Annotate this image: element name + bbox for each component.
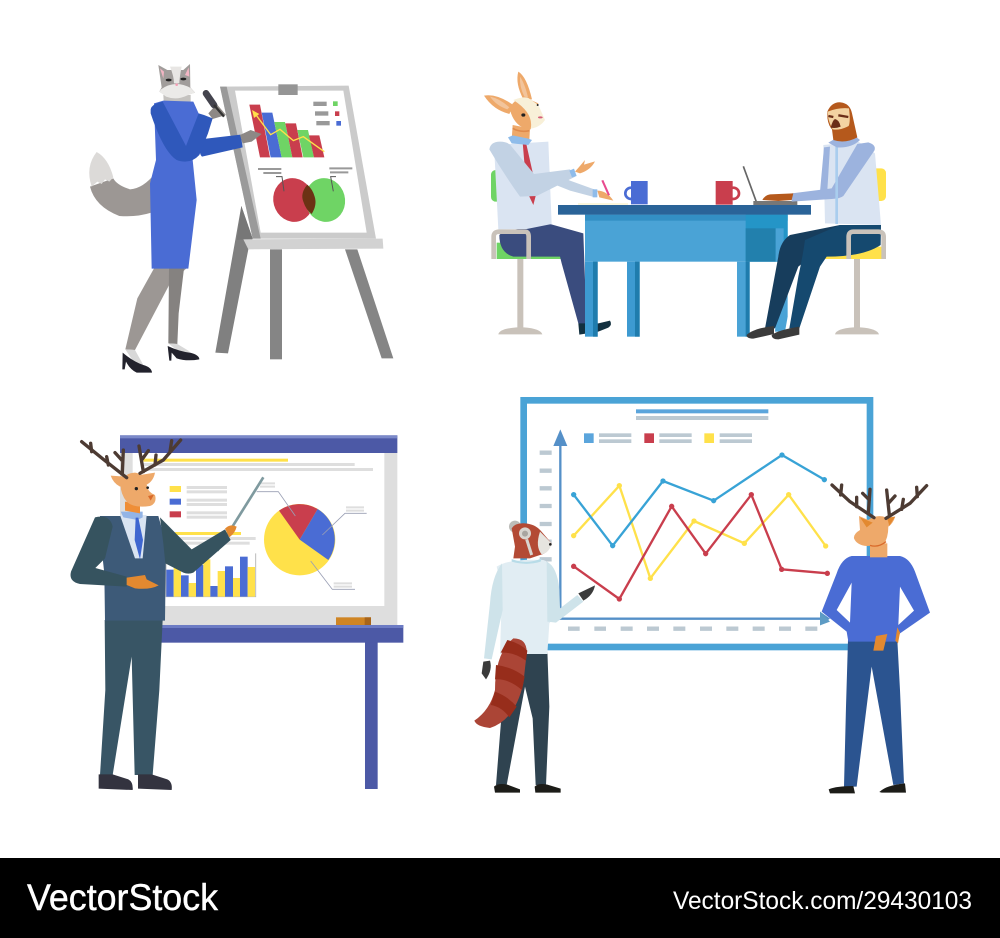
bar chart with trend arrow [249,105,324,157]
red panda tail [474,638,527,728]
deer shoes [99,774,172,790]
red mug [716,181,739,205]
sloth arm and hands [762,142,875,224]
brand name: VectorStock [27,877,218,918]
cat tail [89,152,155,216]
deer shirt and tie [120,512,147,559]
board heading lines [636,409,768,420]
chart axes and ticks [540,429,830,629]
red panda legs and shoes [494,650,561,793]
easel board [220,84,383,249]
left chair [491,170,562,334]
sloth shoes [747,326,799,339]
pointer stick [217,477,263,551]
table [558,205,811,337]
deer arms and hands [71,517,237,589]
deer neck [125,502,140,513]
cat neck [163,95,191,111]
table leg [365,642,378,789]
rabbit neck and collar [508,125,532,145]
red panda head [509,521,552,564]
rabbit trousers and shoes [499,224,611,335]
deer neck and head [854,516,895,557]
deer sweater [822,556,930,642]
chart legend [584,433,752,443]
blue mug [625,181,648,204]
scene: deer presenter at whiteboard with pie chart [71,435,403,790]
stacked bar chart [166,553,256,597]
board heading lines [143,459,373,545]
deer head [111,473,156,507]
scene: cat presenter at flip-chart easel [89,64,393,373]
easel legs [215,206,393,359]
right chair [823,168,886,334]
chart legend [313,101,341,126]
sloth legs [765,225,881,328]
cat arms [151,102,243,162]
deer trousers [100,620,163,775]
cat hands and microphone [206,93,262,143]
cat legs and shoes [122,267,199,373]
table top and eraser [160,617,403,643]
rabbit tie [523,143,536,205]
pie chart [257,483,367,589]
red panda sweater and arms [482,560,595,679]
sloth head [827,102,860,147]
whiteboard frame [524,400,870,647]
rabbit hands and pen [575,160,628,205]
board legend [170,486,227,519]
cat head [158,64,195,98]
line chart: blue series [571,452,827,548]
rabbit shirt [494,142,552,229]
venn diagram [258,168,352,226]
rabbit head [484,72,545,129]
laptop [743,166,797,205]
rabbit arms [489,142,597,197]
deer trousers and shoes [829,640,906,793]
line chart: red series [571,492,830,602]
line chart: yellow series [571,483,828,581]
footer watermark bar [0,858,1000,938]
deer hands [820,612,900,651]
presentation board [120,435,397,627]
scene: rabbit and sloth meeting at table [484,72,886,339]
chair armrests [494,232,884,259]
image id url: VectorStock.com/29430103 [673,887,972,915]
deer antlers [832,485,927,518]
scene: red panda and deer at line chart board [474,400,930,793]
deer jacket [100,516,166,621]
cat dress [150,101,199,269]
deer antlers [82,440,181,478]
sloth shirt [823,142,881,225]
